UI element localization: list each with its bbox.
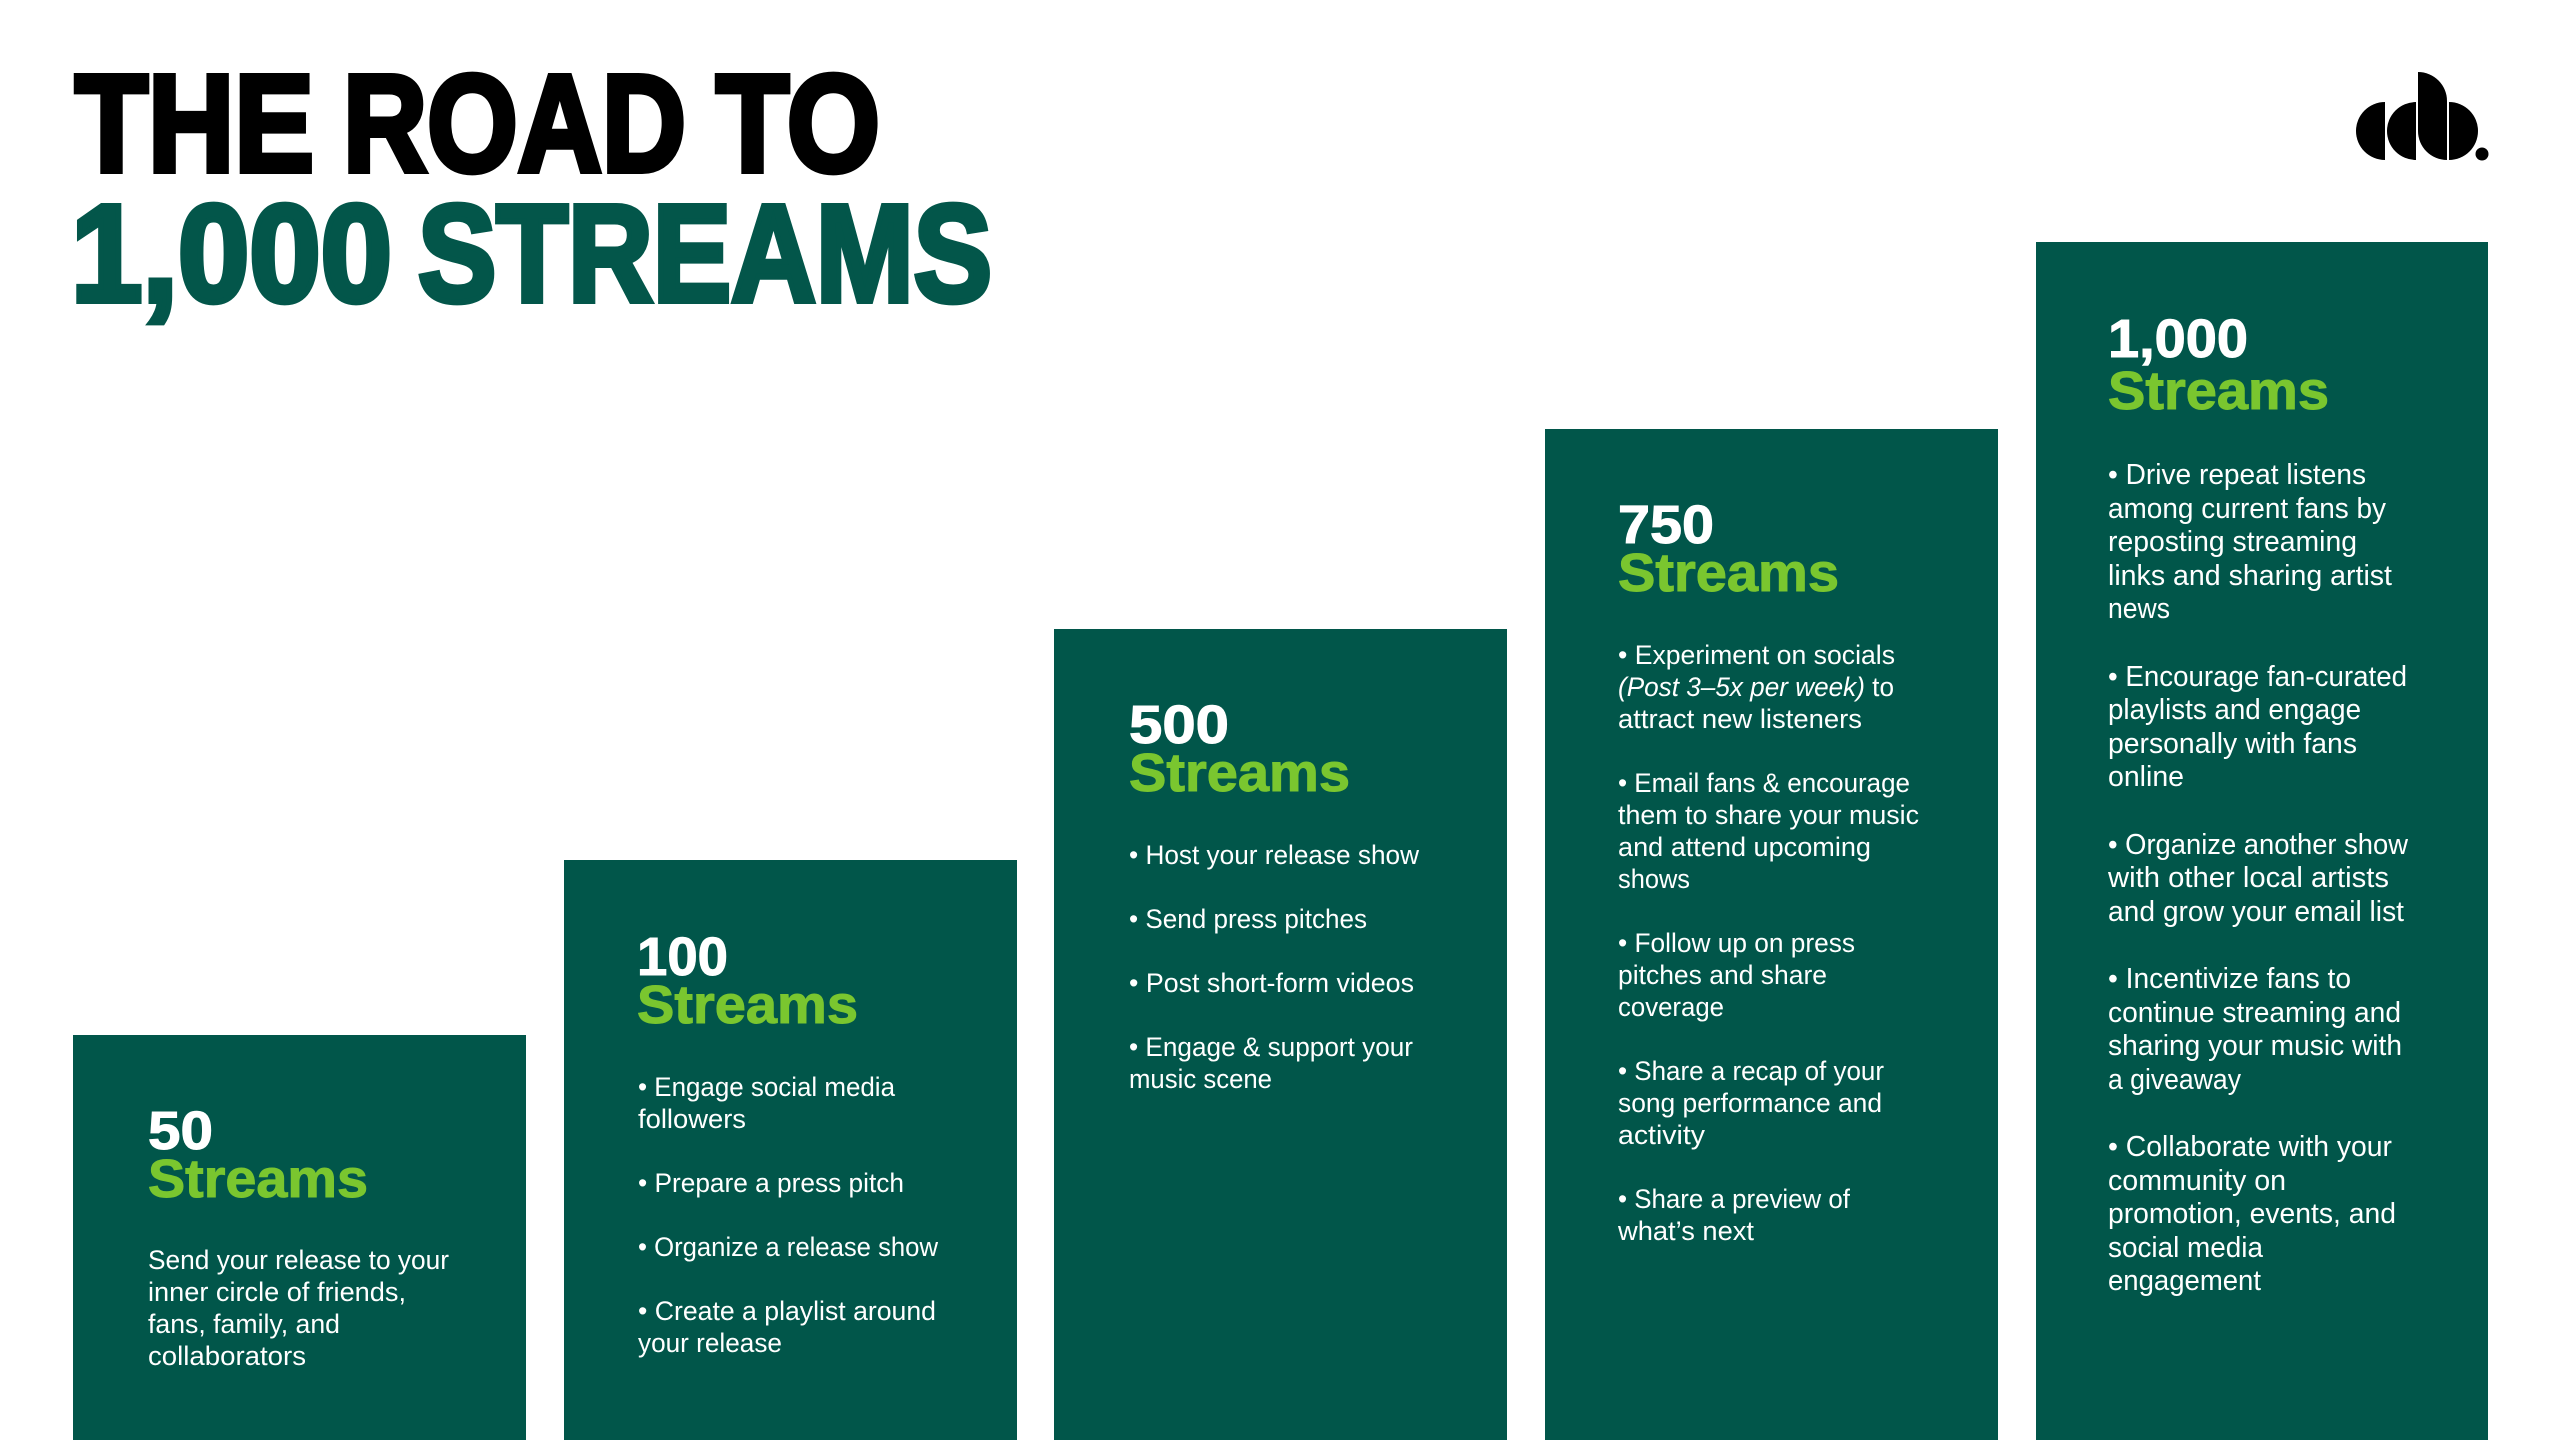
heading: 750 streams [1618,495,1839,603]
icon: logo [2356,72,2488,160]
heading: 50 streams: 50 [148,1101,213,1161]
heading: 1,000 streams: 1,000 [2108,309,2248,369]
text: tips list: • Drive repeat listens [2108,459,2366,491]
text: tips list: • Host your release show [1129,840,1419,870]
text: tips list: • Email fans & encourage [1618,768,1910,798]
heading: 750 streams: Streams [1618,543,1839,603]
text: tips list: shows [1618,864,1690,894]
title [71,47,992,331]
text: description: collaborators [148,1341,306,1371]
text: tips list: • Organize a release show [638,1232,938,1262]
text: tips list: online [2108,761,2184,793]
text: tips list: • Follow up on press [1618,928,1855,958]
text: tips list: followers [638,1104,746,1134]
heading: 1,000 streams: Streams [2108,361,2329,421]
text: tips list: community on [2108,1165,2286,1197]
text: tips list: • Share a recap of your [1618,1056,1884,1086]
text: tips list: playlists and engage [2108,694,2361,726]
heading: 500 streams [1129,695,1350,803]
text: tips list: social media [2108,1232,2263,1264]
text: tips list [638,1072,938,1358]
text: tips list: • Collaborate with your [2108,1131,2392,1163]
text: tips list: news [2108,593,2170,625]
text: tips list: song performance and [1618,1088,1882,1118]
text: tips list: promotion, events, and [2108,1198,2396,1230]
text: tips list: sharing your music with [2108,1030,2402,1062]
heading: 100 streams: Streams [637,975,858,1035]
text: description: inner circle of friends, [148,1277,406,1307]
title: ROAD [343,47,686,201]
text: tips list: with other local artists [2107,862,2389,894]
text: tips list: a giveaway [2108,1064,2242,1096]
text: tips list [2107,459,2408,1297]
heading: 50 streams: Streams [148,1149,368,1209]
heading: 100 streams: 100 [637,927,728,987]
text: tips list: • Send press pitches [1129,904,1367,934]
text: tips list: them to share your music [1618,800,1919,830]
panel: 50 streams [73,1035,526,1440]
heading: 500 streams: Streams [1129,743,1350,803]
text: description: fans, family, and [148,1309,340,1339]
text: tips list: activity [1618,1120,1706,1150]
text: tips list: your release [638,1328,782,1358]
heading: 1,000 streams [2108,309,2329,421]
text: tips list: • Engage & support your [1129,1032,1413,1062]
heading: 500 streams: 500 [1129,695,1229,755]
text: tips list: what’s next [1617,1216,1755,1246]
title: STREAMS [418,177,992,331]
text: tips list: • Prepare a press pitch [638,1168,904,1198]
text: tips list: • Experiment on socials [1618,640,1895,670]
title: 1,000 [71,177,392,331]
text: tips list [1129,840,1419,1094]
panel: 1,000 streams [2036,242,2488,1440]
text: description [148,1245,449,1371]
text: tips list: • Post short-form videos [1129,968,1414,998]
panel: 750 streams [1545,429,1998,1440]
panel: 100 streams [564,860,1017,1440]
text: tips list: • Share a preview of [1618,1184,1850,1214]
text: tips list: • Engage social media [638,1072,896,1102]
text: tips list: and grow your email list [2108,896,2404,928]
text: tips list: • Create a playlist around [638,1296,936,1326]
heading: 750 streams: 750 [1618,495,1714,555]
text: tips list: links and sharing artist [2108,560,2392,592]
text: tips list: • Encourage fan-curated [2108,661,2407,693]
text: tips list: reposting streaming [2108,526,2357,558]
text: tips list: music scene [1129,1064,1272,1094]
text: tips list: and attend upcoming [1618,832,1871,862]
text: tips list: attract new listeners [1618,704,1862,734]
heading: 50 streams [148,1101,368,1209]
panel: 500 streams [1054,629,1507,1440]
text: tips list: personally with fans [2108,728,2357,760]
title: TO [716,47,880,201]
text: tips list: pitches and share [1618,960,1827,990]
text: tips list: • Incentivize fans to [2108,963,2351,995]
text: tips list: among current fans by [2108,493,2387,525]
text: tips list: coverage [1618,992,1724,1022]
title: THE [75,47,314,201]
text: tips list: (Post 3–5x per week) to [1618,672,1894,702]
text: tips list [1617,640,1919,1246]
text: description: Send your release to your [148,1245,449,1275]
text: tips list: • Organize another show [2108,829,2408,861]
text: tips list: continue streaming and [2108,997,2401,1029]
text: tips list: engagement [2108,1265,2261,1297]
heading: 100 streams [637,927,858,1035]
